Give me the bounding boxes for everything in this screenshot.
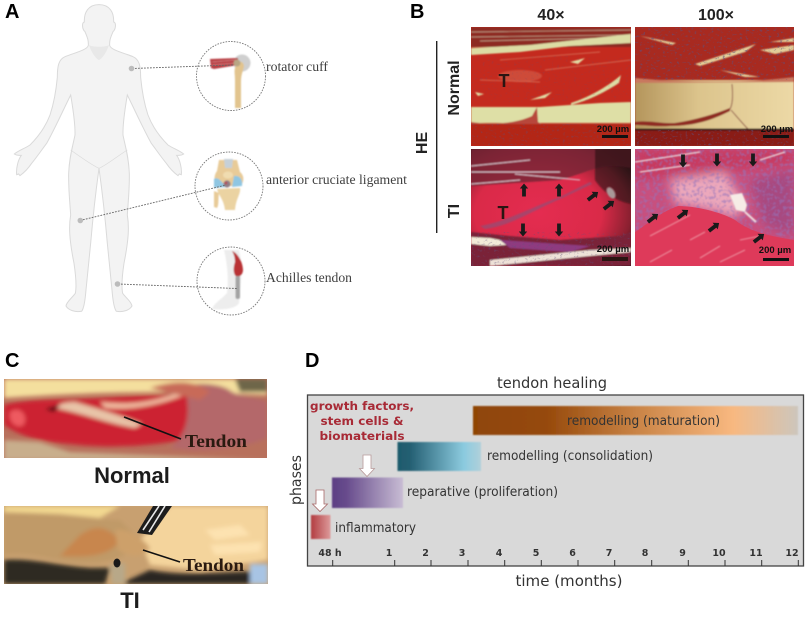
x axis ticks and labels: 48 h (318, 548, 342, 559)
scale bar (597, 244, 629, 261)
bar: reparative proliferation (332, 478, 558, 508)
row label HE: HE (414, 132, 431, 154)
panel: B histology (410, 1, 794, 266)
row divider line (436, 41, 437, 233)
x axis ticks and labels: 4 (496, 548, 503, 559)
panel: A body map (5, 1, 407, 315)
label: Achilles tendon (266, 271, 352, 286)
x axis ticks and labels: 9 (679, 548, 686, 559)
scale bar: 200 µm (759, 245, 791, 256)
chart frame (308, 395, 804, 566)
callout: growth factors, stem cells and biomaterials: biomaterials (320, 429, 405, 443)
x axis ticks and labels: 10 (712, 548, 726, 559)
leader line (124, 417, 181, 439)
panel: C tendon photographs (4, 350, 268, 613)
scale bar: 200 µm (597, 244, 629, 255)
heading: C: C (5, 350, 19, 372)
marker dots and leader lines (78, 65, 237, 288)
x axis ticks and labels: 5 (533, 548, 539, 559)
callout: Achilles tendon (197, 247, 352, 315)
callout: growth factors, stem cells and biomaterials: growth factors, (310, 399, 414, 413)
x axis label: time (months) (516, 572, 622, 590)
row label TI: TI (446, 204, 463, 218)
scale bar (759, 245, 791, 261)
x axis ticks and labels: 6 (569, 548, 576, 559)
x axis ticks and labels (318, 548, 799, 566)
chart title: tendon healing (497, 374, 607, 392)
bar: reparative proliferation: reparative (proliferation) (407, 485, 558, 500)
heading: A: A (5, 1, 19, 23)
caption Normal: Normal (94, 463, 170, 488)
x axis ticks and labels: 1 (386, 548, 392, 559)
column label 40x: 40× (537, 7, 565, 24)
heading: B: B (410, 1, 424, 23)
micrograph: TI 100x (635, 149, 794, 266)
arrow: to reparative phase (360, 455, 374, 476)
arrows: TI 100x (645, 154, 767, 245)
x axis ticks and labels: 7 (606, 548, 612, 559)
label: anterior cruciate ligament (266, 173, 407, 188)
row label Normal: Normal (446, 60, 463, 116)
callout: anterior cruciate ligament (195, 152, 407, 220)
bar: inflammatory: inflammatory (335, 521, 416, 536)
x axis ticks and labels: 12 (785, 548, 799, 559)
caption TI: TI (120, 588, 140, 613)
micrograph: normal 100x (635, 27, 794, 146)
arrows: TI 40x (519, 184, 617, 236)
label T: T (498, 203, 508, 223)
bar: remodelling consolidation: remodelling (consolidation) (487, 449, 653, 464)
y axis label: phases (287, 455, 305, 505)
human body figure (14, 5, 184, 312)
label Tendon: Tendon (183, 555, 244, 575)
column label 100x: 100× (698, 7, 734, 24)
callout: rotator cuff (196, 42, 328, 110)
heading: D: D (305, 350, 319, 372)
bar: remodelling maturation (473, 406, 798, 435)
x axis ticks and labels: 2 (422, 548, 429, 559)
callout: growth factors, stem cells and biomaterials (310, 399, 414, 443)
panel: D healing timeline (287, 350, 804, 590)
scale bar: 200 µm (761, 124, 793, 135)
micrograph: TI 40x (471, 149, 631, 266)
scale bar: 200 µm (597, 124, 629, 135)
x axis ticks and labels: 11 (749, 548, 763, 559)
label T: T (498, 71, 510, 91)
callout: growth factors, stem cells and biomaterials: stem cells & (320, 414, 404, 428)
x axis ticks and labels: 8 (642, 548, 649, 559)
label Tendon: Tendon (185, 431, 247, 451)
bar: inflammatory (311, 515, 416, 539)
x axis ticks and labels: 3 (459, 548, 465, 559)
leader line (143, 550, 180, 562)
label: rotator cuff (266, 60, 328, 75)
bar: remodelling consolidation (398, 442, 653, 471)
arrow: to inflammatory phase (312, 490, 328, 512)
micrograph: normal 40x (471, 27, 631, 146)
bar: remodelling maturation: remodelling (maturation) (567, 414, 720, 429)
photo: TI tendon (4, 506, 268, 584)
photo: normal tendon (4, 379, 267, 460)
